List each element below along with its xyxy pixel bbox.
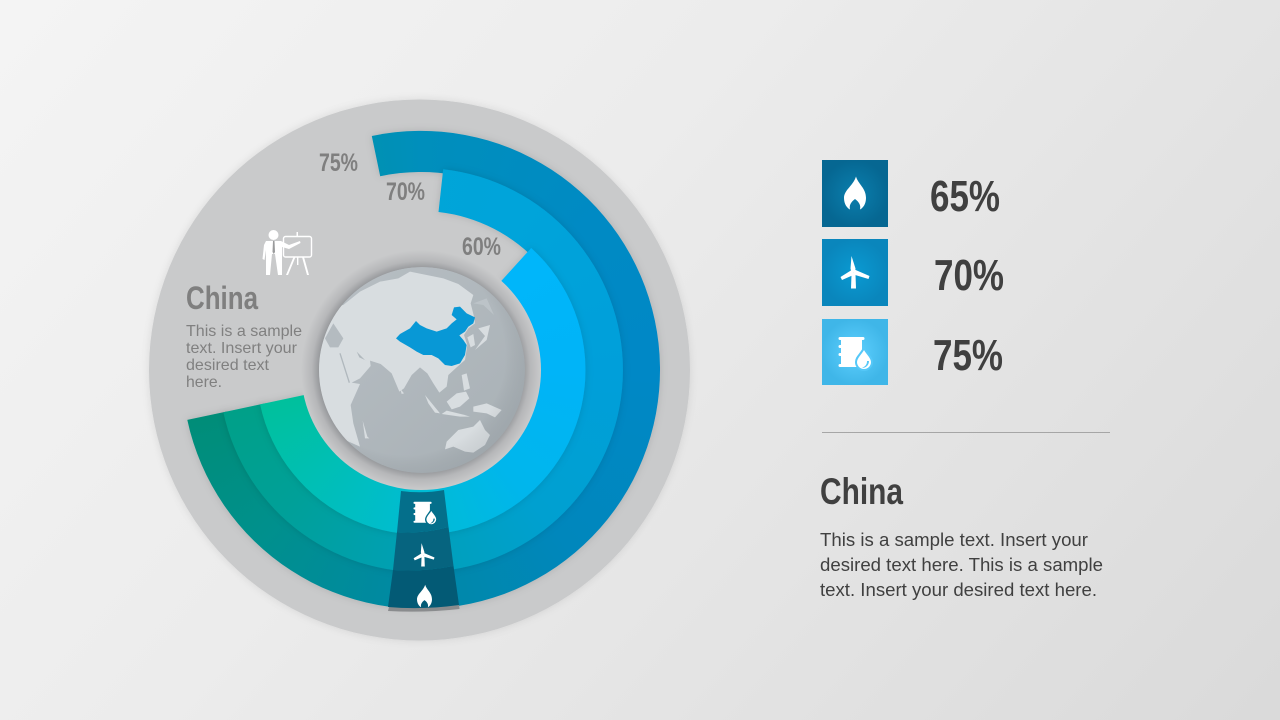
right description: desired text here. This is a sample	[820, 554, 1103, 575]
globe well	[301, 250, 541, 490]
legend row: oil 75%	[822, 319, 1003, 385]
outer grey disc	[149, 100, 690, 640]
legend row: wind 70%: 70%	[934, 251, 1004, 300]
legend row: gas 65%	[822, 160, 1000, 227]
icon: presenter at board	[262, 230, 312, 275]
ring: 75% oil	[171, 120, 671, 620]
left description: desired text	[186, 357, 270, 374]
legend row: oil 75%: 75%	[933, 331, 1003, 380]
map: China highlighted	[396, 307, 475, 366]
left description	[186, 323, 302, 391]
left description: This is a sample	[186, 323, 302, 340]
icon strip	[388, 490, 460, 612]
continents	[310, 272, 502, 453]
icon: wind turbine	[840, 256, 870, 288]
right description: This is a sample text. Insert your	[820, 529, 1088, 550]
icon: flame	[844, 176, 866, 210]
donut chart	[149, 100, 690, 640]
right heading: China	[820, 471, 903, 512]
icon: wind turbine small	[414, 543, 435, 567]
icon: flame small	[417, 585, 432, 607]
left heading: China	[186, 280, 258, 316]
percent label 75%: 75%	[319, 149, 358, 177]
legend	[822, 160, 1004, 385]
left description: here.	[186, 374, 222, 391]
right description	[820, 529, 1103, 600]
legend row: wind 70%	[822, 239, 1004, 306]
ring: 60% gas	[260, 248, 588, 534]
ring: 70% wind	[223, 168, 624, 570]
globe	[310, 267, 525, 473]
icon: oil barrel	[838, 337, 872, 370]
icon: oil barrel small	[413, 502, 437, 525]
percent label 70%: 70%	[386, 178, 425, 206]
percent label 60%: 60%	[462, 233, 501, 261]
left description: text. Insert your	[186, 340, 298, 357]
legend row: gas 65%: 65%	[930, 172, 1000, 221]
right description: text. Insert your desired text here.	[820, 579, 1097, 600]
